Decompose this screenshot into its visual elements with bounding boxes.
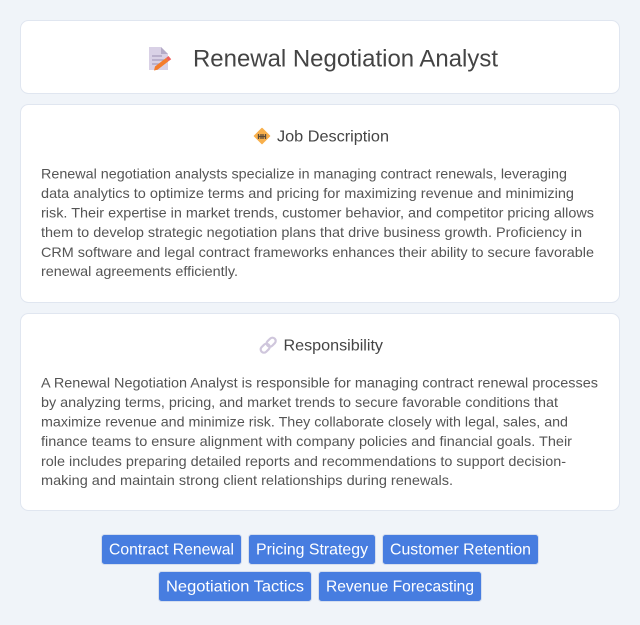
tag: Negotiation Tactics — [158, 572, 312, 602]
text block: responsibility: A Renewal Negotiation Analyst is responsible for managing contract renewal processes — [41, 374, 598, 390]
text block: job description: risk. Their expertise in market trends, customer behavior, and competitor pricing allows — [41, 205, 594, 221]
text block: responsibility: by analyzing terms, pricing, and market trends to secure favorable conditions that — [41, 394, 558, 410]
text block: job description — [41, 166, 594, 279]
text block: job description: them to develop strategic negotiation plans that drive business growth. Proficiency in — [41, 224, 582, 240]
panel: responsibility — [20, 314, 620, 510]
tag: Customer Retention — [382, 534, 538, 564]
text block: responsibility: making and maintain strong client relationships during renewals. — [41, 472, 453, 488]
text block: job description: data analytics to optimize terms and pricing for maximizing revenue and minimizing — [41, 185, 574, 201]
icon: chain link — [259, 336, 277, 354]
text block: responsibility: maximize revenue and minimize risk. They collaborate closely with legal, sales, and — [41, 414, 568, 430]
tag: Pricing Strategy — [248, 534, 376, 564]
text block: responsibility: role includes preparing detailed reports and recommendations to support decision- — [41, 453, 566, 469]
text block: job description: Renewal negotiation analysts specialize in managing contract renewals, leveraging — [41, 166, 567, 182]
text block: responsibility: finance teams to ensure alignment with company policies and financial goals. Their — [41, 433, 572, 449]
tag: Customer Retention: Customer Retention — [390, 542, 531, 558]
panel: title — [20, 20, 620, 94]
text block: job description: CRM software and legal contract frameworks enhances their ability to secure favorable — [41, 244, 594, 260]
icon: orange diamond — [254, 128, 270, 144]
tag: Contract Renewal — [102, 534, 242, 564]
tag: Revenue Forecasting — [318, 572, 482, 602]
heading: responsibility: Responsibility — [284, 338, 383, 354]
heading: title text: Renewal Negotiation Analyst — [193, 46, 498, 72]
text block: job description: renewal agreements efficiently. — [41, 263, 238, 279]
tag: Revenue Forecasting: Revenue Forecasting — [326, 578, 474, 596]
heading: job description: Job Description — [277, 128, 389, 146]
text block: responsibility — [41, 374, 598, 488]
icon: document with pencil — [149, 47, 171, 70]
panel: job description — [20, 104, 620, 302]
tag: Negotiation Tactics: Negotiation Tactics — [166, 578, 304, 596]
tag: Pricing Strategy: Pricing Strategy — [256, 542, 368, 558]
tag: Contract Renewal: Contract Renewal — [109, 542, 234, 558]
